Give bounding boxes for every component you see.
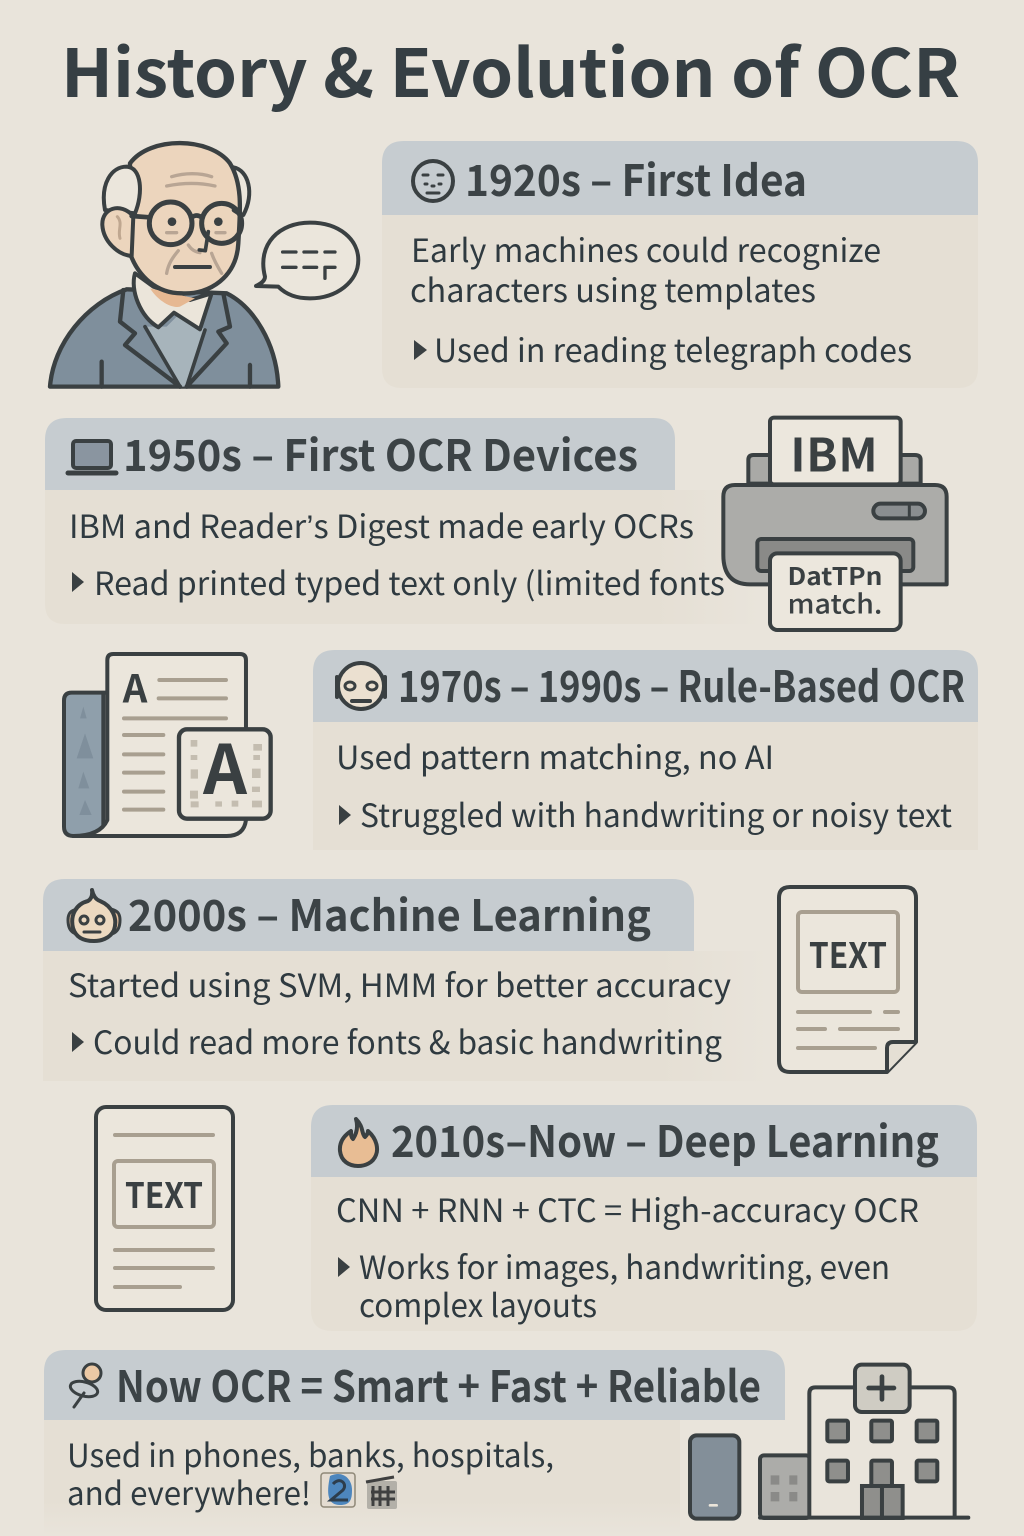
heading bar 2000s bbox=[43, 879, 694, 951]
text: used everywhere bbox=[67, 1431, 554, 1515]
heading bar 1920s bbox=[382, 141, 978, 215]
heading bar 1950s bbox=[45, 418, 675, 490]
heading bar 2010s bbox=[311, 1105, 977, 1177]
icon: IBM printer bbox=[723, 418, 947, 630]
icon: TEXT document: TEXT bbox=[125, 1168, 203, 1219]
icon: robot face with headset bbox=[337, 663, 385, 709]
panel: 2010s-now deep learning bbox=[311, 1105, 977, 1331]
heading 1920s: 1920s – First Idea bbox=[465, 147, 807, 209]
panel: 1920s first idea bbox=[382, 141, 978, 388]
text: description 1920s: characters using templates bbox=[410, 266, 816, 312]
text: description 1950s: IBM and Reader’s Digest made early OCRs bbox=[69, 502, 694, 548]
icon: blue emoji tile bbox=[321, 1473, 355, 1507]
heading 1950s: 1950s – First OCR Devices bbox=[123, 422, 638, 484]
panel: 1970s-1990s rule-based OCR bbox=[313, 650, 978, 850]
icon: scanned document with letter A: A bbox=[122, 659, 148, 714]
heading 2010s: 2010s–Now – Deep Learning bbox=[391, 1108, 939, 1170]
bullet 2010s: complex layouts bbox=[359, 1281, 597, 1327]
panel: 2000s machine learning bbox=[43, 879, 768, 1081]
icon: phone and hospital bbox=[690, 1365, 968, 1519]
text: description 1970s: Used pattern matching, no AI bbox=[336, 733, 774, 779]
heading now: Now OCR = Smart + Fast + Reliable bbox=[116, 1353, 761, 1415]
icon: TEXT document with folded corner: TEXT bbox=[809, 928, 887, 979]
icon: scanned document with letter A bbox=[64, 654, 271, 836]
icon: scanned document with letter A: A bbox=[202, 715, 248, 814]
icon: flame bbox=[340, 1119, 377, 1166]
heading bar 1970s bbox=[313, 650, 978, 722]
icon: robot baby head bbox=[68, 890, 120, 941]
text: description 1920s: Early machines could recognize bbox=[411, 226, 881, 272]
bullet 1970s: Struggled with handwriting or noisy text bbox=[360, 791, 952, 837]
icon: IBM printer: IBM bbox=[790, 420, 878, 486]
bullet 2010s bbox=[338, 1243, 890, 1327]
text: description 2000s: Started using SVM, HMM for better accuracy bbox=[68, 961, 731, 1007]
icon: TEXT document bbox=[96, 1107, 233, 1310]
bullet 1950s: Read printed typed text only (limited fonts bbox=[94, 559, 725, 605]
bullet 2000s: Could read more fonts & basic handwriting bbox=[93, 1018, 722, 1064]
icon: old inventor with speech bubble bbox=[50, 143, 358, 387]
text: description 1920s bbox=[410, 226, 881, 312]
bullet 2010s: Works for images, handwriting, even bbox=[359, 1243, 890, 1289]
icon: swaddled figure bbox=[69, 1364, 101, 1407]
text: description 2010s: CNN + RNN + CTC = High-accuracy OCR bbox=[336, 1186, 919, 1232]
icon: TEXT document with folded corner bbox=[779, 887, 916, 1072]
text: used everywhere: Used in phones, banks, hospitals, bbox=[67, 1431, 554, 1477]
heading bar now bbox=[44, 1350, 785, 1420]
bullet 1920s: Used in reading telegraph codes bbox=[434, 326, 912, 372]
heading 2000s: 2000s – Machine Learning bbox=[128, 882, 651, 944]
icon: laptop bbox=[68, 441, 116, 473]
icon: IBM printer: DatTPn bbox=[787, 557, 882, 592]
panel: 1950s first OCR devices bbox=[45, 418, 760, 624]
icon: small building tile bbox=[366, 1477, 397, 1509]
icon: IBM printer: match. bbox=[787, 582, 882, 621]
title: History & Evolution of OCR bbox=[61, 21, 960, 117]
panel: now OCR summary bbox=[44, 1350, 785, 1536]
text: used everywhere: and everywhere! bbox=[67, 1469, 311, 1515]
icon: face bbox=[413, 161, 453, 201]
